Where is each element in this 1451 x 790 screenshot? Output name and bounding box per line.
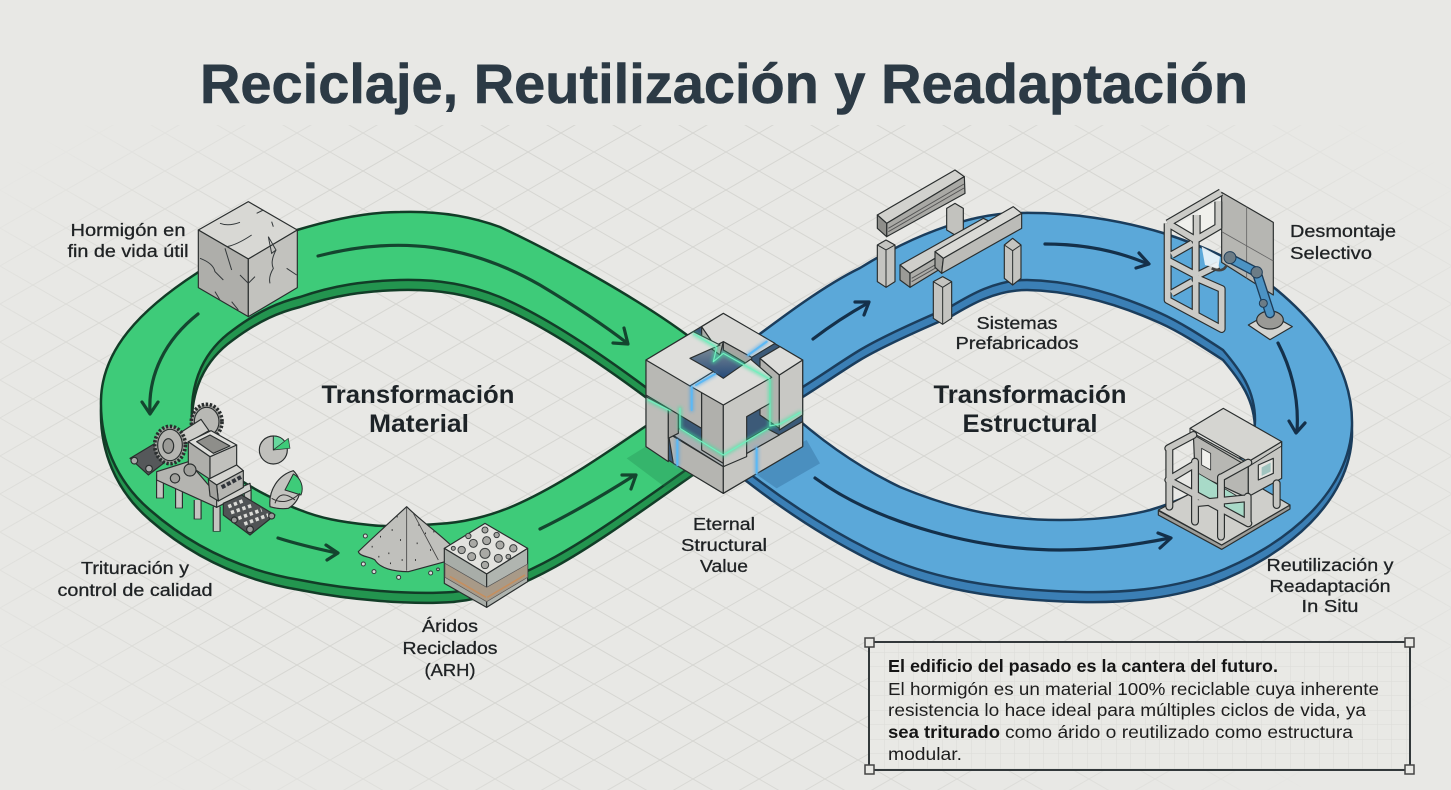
heading: transformación estructural: Estructural	[962, 410, 1098, 438]
heading: transformación material	[322, 381, 514, 438]
callout box: sea triturado	[888, 722, 1000, 742]
icon: crushing machine with conveyors	[130, 404, 302, 535]
middle column	[933, 277, 952, 324]
back block	[702, 313, 775, 367]
callout box: como árido o reutilizado como estructura	[1005, 722, 1353, 742]
quality pie top	[259, 436, 290, 464]
chassis	[157, 462, 220, 507]
label: reutilización in situ: Reutilización y	[1266, 555, 1394, 575]
right conveyor	[223, 495, 275, 535]
heading: transformación material: Transformación	[322, 381, 514, 409]
lower beam	[900, 218, 993, 287]
icon: reused building structure	[1158, 408, 1290, 549]
robot base	[1248, 313, 1292, 340]
heading: transformación estructural	[934, 381, 1126, 438]
callout box	[865, 638, 1414, 774]
control step	[208, 465, 243, 485]
label: reutilización in situ	[1266, 555, 1394, 616]
label: desmontaje selectivo: Selectivo	[1290, 243, 1372, 263]
label: áridos reciclados	[402, 616, 498, 680]
label: eternal structural value: Structural	[681, 535, 767, 555]
white pane	[1198, 200, 1220, 240]
infinity band: blue loop	[745, 213, 1352, 602]
label: áridos reciclados: Reciclados	[402, 638, 498, 658]
label: sistemas prefabricados	[956, 313, 1079, 353]
frame legs	[160, 475, 248, 532]
icon: aggregate pile	[358, 507, 451, 579]
top-left block	[646, 332, 720, 428]
label: trituración: control de calidad	[58, 580, 212, 600]
label: hormigón	[68, 220, 188, 261]
front frame	[1168, 192, 1222, 329]
icon: prefabricated beams and columns	[877, 170, 1022, 324]
hopper	[188, 442, 210, 479]
infinity band: green loop	[101, 212, 700, 603]
callout box: El hormigón es un material 100% reciclable cuya inherente	[888, 679, 1379, 699]
callout box: El edificio del pasado es la cantera del futuro.	[888, 656, 1278, 676]
rear gear	[191, 404, 222, 439]
label: sistemas prefabricados: Prefabricados	[956, 333, 1079, 353]
heading: transformación estructural: Transformación	[934, 381, 1126, 409]
icon: interlocking concrete cube	[627, 313, 820, 493]
roller	[177, 419, 209, 443]
left conveyor	[130, 443, 170, 475]
robot arm	[1212, 252, 1270, 313]
label: trituración	[58, 558, 212, 600]
back beam	[877, 170, 965, 237]
back column	[947, 203, 963, 235]
label: trituración: Trituración y	[81, 558, 189, 578]
quality pie bottom	[270, 471, 302, 509]
label: hormigón: Hormigón en	[70, 220, 186, 240]
front L block	[690, 359, 772, 467]
left column	[877, 240, 895, 287]
label: reutilización in situ: In Situ	[1302, 596, 1358, 616]
flow arrows: blue	[813, 244, 1305, 550]
label: áridos reciclados: Áridos	[422, 616, 478, 636]
base block	[668, 422, 803, 493]
glowing seams	[648, 334, 800, 473]
front gear	[155, 426, 185, 464]
label: eternal structural value: Eternal	[693, 514, 755, 534]
back panel	[1222, 192, 1273, 295]
label: desmontaje selectivo: Desmontaje	[1290, 221, 1396, 241]
icon: robot dismantling frame	[1168, 192, 1292, 340]
label: reutilización in situ: Readaptación	[1270, 576, 1390, 596]
title: Reciclaje, Reutilización y Readaptación	[200, 52, 1248, 115]
heading: transformación material: Material	[369, 410, 469, 438]
label: sistemas prefabricados: Sistemas	[976, 313, 1058, 333]
flow arrows: green	[142, 245, 636, 560]
callout box: resistencia lo hace ideal para múltiples ciclos de vida, ya	[888, 700, 1366, 720]
icon: cracked concrete cube	[198, 202, 297, 317]
label: eternal structural value: Value	[700, 556, 748, 576]
top beam	[935, 207, 1022, 273]
right column	[760, 347, 803, 430]
label: desmontaje selectivo	[1290, 221, 1396, 263]
label: eternal structural value	[681, 514, 767, 576]
icon: recycled aggregate soil block	[444, 523, 528, 607]
label: áridos reciclados: (ARH)	[424, 660, 476, 680]
left lower column	[646, 393, 678, 462]
interior	[646, 313, 803, 493]
right column	[1004, 238, 1021, 285]
callout box: modular.	[888, 744, 962, 764]
label: hormigón: fin de vida útil	[68, 241, 188, 261]
